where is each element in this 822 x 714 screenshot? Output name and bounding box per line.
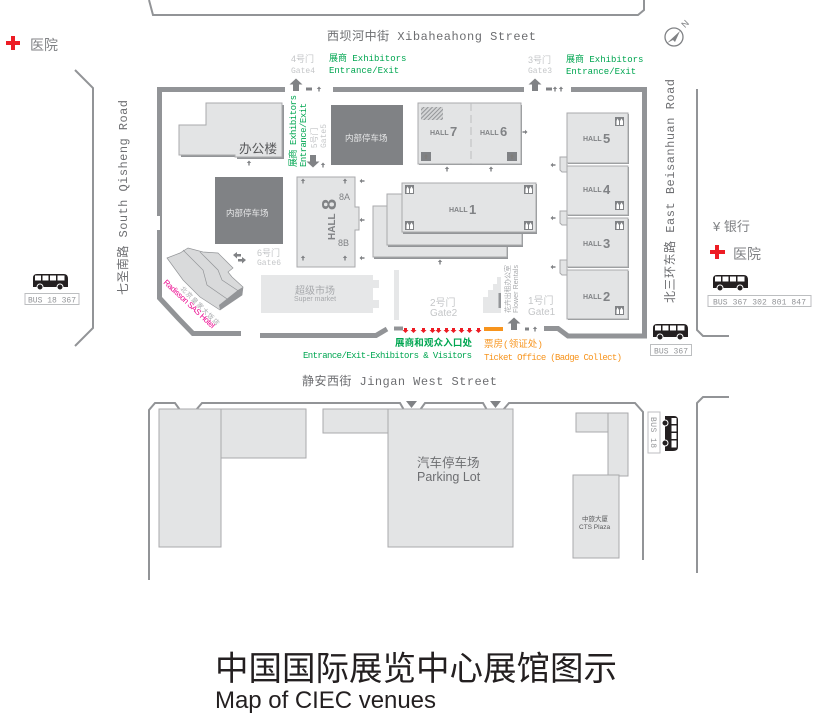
panel: CTS Plaza bbox=[573, 475, 619, 558]
red entrance arrows bbox=[402, 328, 482, 333]
street label: Xibaheahong Street: 西坝河中街 Xibaheahong Street bbox=[327, 28, 536, 44]
entrance label: 展商和观众入口处 bbox=[395, 337, 472, 349]
gate 6 label: Gate6 bbox=[257, 259, 281, 268]
panel: hall 2 bbox=[567, 270, 629, 320]
gate 5 label: 5号门 bbox=[309, 128, 319, 148]
panel: hall 7 and 6: 6 bbox=[500, 124, 507, 139]
block: CTS annex bbox=[576, 413, 628, 476]
gate 3 label: Gate3 bbox=[528, 67, 552, 76]
gate 6 arrows bbox=[233, 252, 246, 264]
icon: compass: N bbox=[679, 18, 691, 30]
panel: inner parking 2 bbox=[215, 177, 283, 244]
gate 6 label: 6号门 bbox=[257, 247, 280, 258]
ticket office label: 票房(领证处) bbox=[484, 338, 543, 350]
right road east side bbox=[697, 89, 729, 336]
flower and power rental building bbox=[483, 264, 520, 313]
panel: hall 5: HALL bbox=[583, 136, 602, 143]
panel: hall 8: 8A bbox=[339, 192, 350, 202]
bus stop left: BUS 18 367 bbox=[28, 296, 76, 306]
gate 1 arrows bbox=[508, 318, 537, 332]
panel: hall 8 bbox=[297, 177, 359, 267]
panel: hall 2: HALL bbox=[583, 294, 602, 301]
panel: hotel: Radisson SAS Hotel bbox=[162, 278, 217, 330]
bus stop right: BUS 367 302 801 847 bbox=[713, 298, 806, 308]
panel: CTS Plaza: CTS Plaza bbox=[579, 524, 610, 531]
gate 1 label: 1号门 bbox=[528, 294, 554, 307]
panel: inner parking 1: 内部停车场 bbox=[345, 133, 388, 143]
ticket office bar bbox=[484, 327, 503, 331]
panel: hall 8: 8B bbox=[338, 238, 349, 248]
gate 2 bar bbox=[394, 270, 399, 320]
exhibitors vertical label gate 5 bbox=[287, 95, 309, 167]
panel: supermarket: 超级市场 bbox=[295, 284, 335, 297]
gate 1 label bbox=[528, 294, 556, 318]
panel: parking lot: Parking Lot bbox=[417, 470, 481, 484]
entrance label bbox=[303, 337, 472, 361]
exhibitors label gate 4: 展商 Exhibitors bbox=[329, 52, 406, 64]
block: south centre small bbox=[323, 409, 388, 433]
panel: hall 7 and 6: HALL bbox=[480, 130, 499, 137]
south block roads bbox=[149, 397, 729, 580]
panel: hall 1: 1 bbox=[469, 202, 476, 217]
panel: parking lot: 汽车停车场 bbox=[417, 455, 480, 470]
flower and power rental building: 花卉出租办公室 bbox=[503, 265, 512, 313]
gate 4 label bbox=[291, 53, 315, 76]
gate triangle markers bbox=[406, 401, 501, 408]
block: south west tall bbox=[159, 409, 221, 547]
panel: hall 8: 8 bbox=[319, 199, 341, 210]
gate 4 arrows bbox=[290, 78, 321, 92]
street label: Jingan West Street: 静安西街 Jingan West Street bbox=[302, 373, 497, 389]
icon: compass bbox=[665, 18, 691, 46]
ticket office label: Ticket Office (Badge Collect) bbox=[484, 353, 622, 363]
panel: supermarket bbox=[261, 275, 379, 313]
exhibitors label gate 3 bbox=[566, 53, 643, 77]
panel: inner parking 1 bbox=[331, 105, 403, 165]
hospital label left: 医院 bbox=[30, 37, 58, 53]
bus stop south bbox=[648, 412, 678, 453]
panel: hall 1 bbox=[373, 183, 537, 259]
compound wall bbox=[157, 90, 644, 336]
gate 2 label: Gate2 bbox=[430, 308, 458, 319]
small direction arrows bbox=[247, 130, 556, 269]
gate 5 label bbox=[309, 124, 329, 148]
panel: hall 4: 4 bbox=[603, 182, 611, 197]
street label: East Beisanhuan Road: 北三环东路 East Beisanhuan Road bbox=[662, 79, 678, 303]
panel: office building: 办公楼 bbox=[239, 142, 277, 156]
panel: hall 7 and 6: HALL bbox=[430, 130, 449, 137]
bus stop south: BUS 18 bbox=[648, 417, 657, 448]
panel: supermarket: Super market bbox=[294, 296, 336, 303]
subtitle: Map of CIEC venues bbox=[215, 687, 436, 714]
panel: hall 1: HALL bbox=[449, 207, 468, 214]
panel: hall 5: 5 bbox=[603, 131, 610, 146]
exhibitors vertical label gate 5: 展商 Exhibitors bbox=[287, 95, 299, 167]
top road outline bbox=[149, 0, 644, 15]
gate 3 label: 3号门 bbox=[528, 54, 551, 65]
gate 3 arrows bbox=[528, 78, 563, 92]
gate 2 label bbox=[430, 296, 458, 319]
panel: hall 4 bbox=[560, 166, 629, 225]
gate 2 label: 2号门 bbox=[430, 296, 456, 309]
panel: hotel bbox=[162, 248, 243, 330]
gate 4 label: Gate4 bbox=[291, 67, 315, 76]
exhibitors label gate 4: Entrance/Exit bbox=[329, 66, 399, 76]
bus stop centre bbox=[650, 324, 692, 356]
gate 3 label bbox=[528, 54, 552, 76]
bus stop left bbox=[25, 274, 79, 306]
block: south west wide bbox=[221, 409, 306, 458]
exhibitors label gate 4 bbox=[329, 52, 406, 76]
panel: hall 4: HALL bbox=[583, 187, 602, 194]
exhibitors label gate 3: Entrance/Exit bbox=[566, 67, 636, 77]
panel: CTS Plaza: 中旅大厦 bbox=[582, 514, 608, 523]
panel: hall 5 bbox=[560, 113, 629, 172]
gate 1 label: Gate1 bbox=[528, 307, 556, 318]
street label: South Qisheng Road: 七圣南路 South Qisheng Road bbox=[115, 100, 131, 295]
title: 中国国际展览中心展馆图示 bbox=[215, 651, 617, 688]
panel: hall 3 bbox=[560, 218, 629, 275]
panel: hotel: 北京皇家大饭店 bbox=[179, 284, 222, 328]
panel: hall 3: 3 bbox=[603, 236, 610, 251]
panel: hall 3: HALL bbox=[583, 241, 602, 248]
icon: hospital cross right bbox=[710, 245, 725, 259]
panel: hall 7 and 6 bbox=[418, 103, 522, 165]
panel: office building bbox=[179, 103, 284, 159]
panel: parking lot bbox=[388, 409, 513, 547]
flower and power rental building: Flower Rentals bbox=[513, 264, 520, 313]
exhibitors vertical label gate 5: Entrance/Exit bbox=[299, 103, 309, 167]
bus stop centre: BUS 367 bbox=[654, 348, 688, 356]
gate 6 label bbox=[257, 247, 281, 268]
exhibitors label gate 3: 展商 Exhibitors bbox=[566, 53, 643, 65]
hospital label right: 医院 bbox=[733, 246, 761, 262]
entrance label: Entrance/Exit-Exhibitors & Visitors bbox=[303, 351, 472, 361]
bus stop right bbox=[708, 275, 811, 308]
left road bbox=[75, 70, 93, 346]
gate 5 arrows bbox=[306, 155, 325, 168]
panel: hall 2: 2 bbox=[603, 289, 610, 304]
gate 4 label: 4号门 bbox=[291, 53, 314, 64]
panel: inner parking 2: 内部停车场 bbox=[226, 208, 269, 218]
bank label: ¥ 银行 bbox=[712, 219, 750, 234]
panel: hall 7 and 6: 7 bbox=[450, 124, 457, 139]
panel: hall 8: HALL bbox=[327, 213, 338, 240]
ticket office label bbox=[484, 338, 622, 363]
icon: hospital cross left bbox=[6, 36, 20, 50]
gate 5 label: Gate5 bbox=[320, 124, 329, 148]
